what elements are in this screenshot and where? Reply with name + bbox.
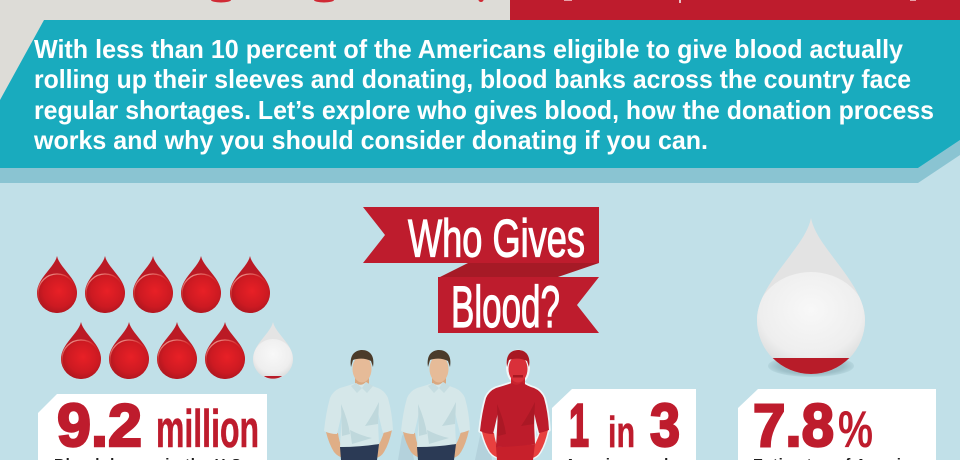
person 3 highlighted in red xyxy=(480,350,549,460)
stat card: 7.8%: 7.8 xyxy=(753,392,834,459)
top header remnant: grey band xyxy=(0,0,510,100)
person 2 xyxy=(401,350,470,460)
icon: mostly empty drop xyxy=(253,322,293,379)
ribbon heading: Who Gives Blood?: Who Gives xyxy=(408,210,585,268)
person 1 xyxy=(324,350,393,460)
intro text xyxy=(33,34,934,155)
top header remnant: red band xyxy=(510,0,960,20)
intro text: regular shortages. Let’s explore who gives blood, how the donation process xyxy=(34,95,934,125)
intro text: works and why you should consider donating if you can. xyxy=(33,125,708,155)
background silhouettes behind people xyxy=(398,428,492,460)
stat card: 9.2 million: 9.2 xyxy=(57,392,142,459)
stat card: 7.8%: % xyxy=(838,401,873,459)
stat card: 7.8% xyxy=(738,389,936,460)
pictogram: nine and a fraction of ten blood drops xyxy=(37,256,293,379)
intro text: With less than 10 percent of the Americans eligible to give blood actually xyxy=(34,34,904,64)
stat card: 1 in 3: 1 xyxy=(569,392,589,459)
icon: large mostly empty blood drop xyxy=(755,218,867,377)
stat card: 9.2 million: million xyxy=(156,400,259,459)
intro banner shadow xyxy=(0,140,960,183)
ribbon heading: Who Gives Blood?: Blood? xyxy=(451,275,560,340)
stat card: 1 in 3: 3 xyxy=(650,392,680,459)
intro text: rolling up their sleeves and donating, blood banks across the country face xyxy=(34,64,911,94)
ribbon heading: Who Gives Blood? xyxy=(363,207,599,340)
stat card: 1 in 3 xyxy=(552,389,696,460)
stat card: 9.2 million xyxy=(38,392,267,460)
stat card: 1 in 3: in xyxy=(608,408,635,457)
intro banner xyxy=(0,20,960,168)
